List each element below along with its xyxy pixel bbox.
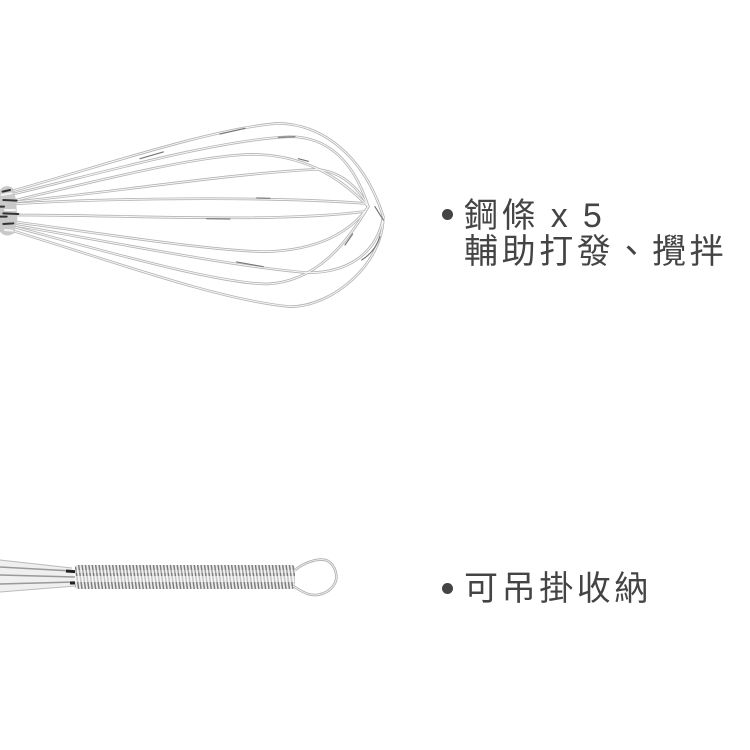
- bullet: hanging storage: [442, 583, 453, 594]
- text: steel wires: [464, 197, 727, 271]
- text: steel wires: 輔助打發、攪拌: [464, 233, 727, 271]
- text: hanging storage: 可吊掛收納: [464, 570, 652, 608]
- bullet: steel wires: [442, 209, 453, 220]
- text: steel wires: 鋼條 x 5: [464, 197, 605, 235]
